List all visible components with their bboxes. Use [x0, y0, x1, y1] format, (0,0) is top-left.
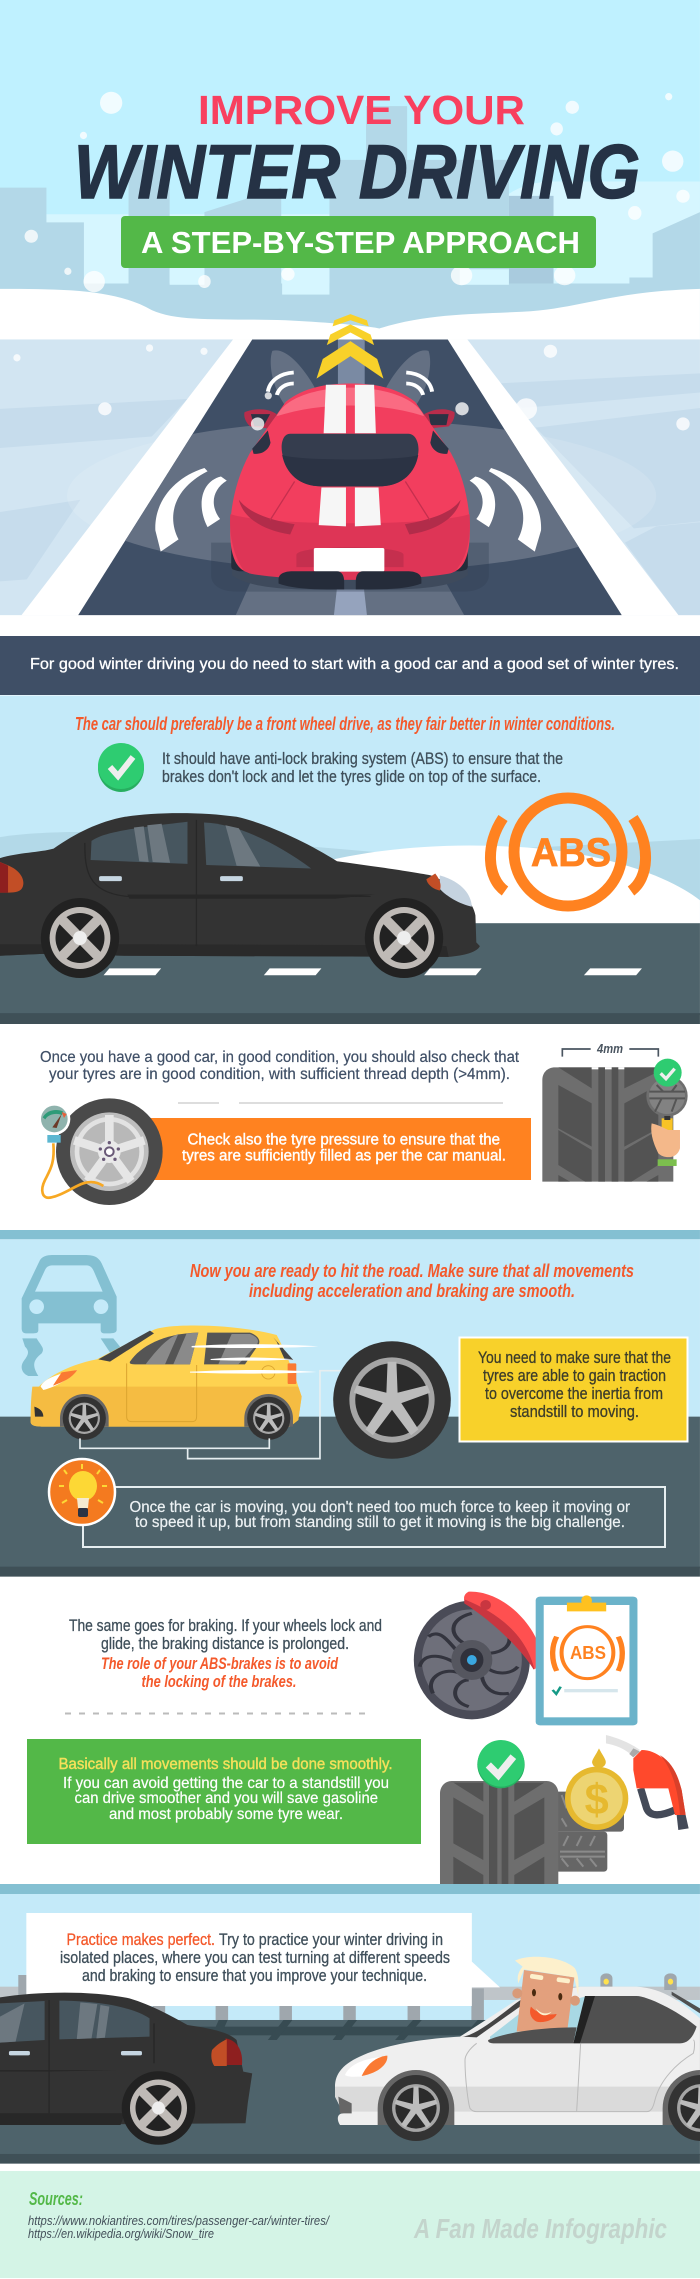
speech bubble text: and braking to ensure that you improve your technique.	[82, 1966, 427, 1985]
large wheel	[333, 1341, 451, 1459]
icon: sensor waves	[155, 373, 541, 552]
green callout	[27, 1739, 421, 1844]
sources heading: Sources:	[29, 2189, 83, 2209]
yellow callout	[460, 1338, 688, 1442]
title: winter driving: WINTER DRIVING	[74, 130, 640, 215]
city skyline	[0, 106, 700, 339]
icon: light bulb	[49, 1459, 115, 1525]
icon: skidding car	[22, 1255, 120, 1376]
green callout: If you can avoid getting the car to a standstill you	[63, 1775, 389, 1792]
moving car callout: Once the car is moving, you don't need too much force to keep it moving or	[130, 1499, 630, 1516]
snowy ground	[0, 339, 700, 615]
orange callout: tyres are sufficiently filled as per the car manual.	[182, 1148, 506, 1164]
black car	[0, 813, 480, 978]
orange callout: Check also the tyre pressure to ensure that the	[188, 1132, 500, 1148]
green callout: Basically all movements should be done smoothly.	[58, 1756, 392, 1773]
falling snow	[13, 92, 690, 430]
speech bubble text	[60, 1930, 450, 1985]
icon: ABS warning light	[490, 798, 646, 906]
speech bubble text: isolated places, where you can test turning at different speeds	[60, 1948, 450, 1967]
footer panel	[0, 2171, 700, 2278]
icon: tread depth: 4mm	[596, 1041, 623, 1056]
tyre condition text: your tyres are in good condition, with sufficient thread depth (>4mm).	[49, 1066, 510, 1083]
icon: check mark	[98, 743, 144, 792]
icon: ABS warning light: ABS	[531, 831, 611, 875]
white car with driver	[335, 1957, 700, 2141]
icon: tyres, coin and fuel nozzle	[440, 1735, 689, 1885]
intro banner	[0, 636, 700, 695]
tyre condition text: Once you have a good car, in good condition, you should also check that	[40, 1049, 520, 1066]
panel: practice	[0, 1884, 700, 2164]
title: improve your: IMPROVE YOUR	[198, 87, 525, 133]
source links	[28, 2214, 330, 2241]
yellow car	[31, 1325, 318, 1440]
intro banner: For good winter driving you do need to start with a good car and a good set of winter tyres.	[30, 656, 679, 673]
subtitle banner: A STEP-BY-STEP APPROACH	[141, 225, 580, 260]
speech bubble text: Practice makes perfect.	[66, 1930, 215, 1949]
connector lines	[80, 1371, 340, 1459]
moving car callout: to speed it up, but from standing still to get it moving is the big challenge.	[135, 1514, 625, 1531]
ABS text block: It should have anti-lock braking system (ABS) to ensure that the	[162, 749, 563, 768]
red car rear view	[211, 384, 489, 592]
braking text: The role of your ABS-brakes is to avoid	[101, 1654, 338, 1673]
icon: tyres, coin and fuel nozzle: $	[585, 1776, 609, 1824]
green callout: can drive smoother and you will save gasoline	[74, 1790, 378, 1807]
black car rear	[0, 1993, 252, 2145]
guard rail	[0, 1973, 700, 2020]
ABS text block: brakes don't lock and let the tyres glide on top of the surface.	[162, 767, 541, 786]
snow hill	[0, 289, 700, 341]
icon: brake disc	[414, 1592, 542, 1719]
braking text	[69, 1616, 382, 1691]
orange callout	[150, 1118, 531, 1180]
panel: check tyres	[0, 1024, 700, 1230]
panel: hero winter scene	[0, 0, 700, 640]
rear window	[282, 434, 419, 486]
panel: braking	[0, 1577, 700, 1885]
tyre condition text	[40, 1049, 520, 1083]
source links: https://www.nokiantires.com/tires/passenger-car/winter-tires/	[28, 2214, 330, 2228]
icon: ABS clipboard: ABS	[570, 1643, 606, 1663]
yellow callout: tyres are able to gain traction	[483, 1366, 666, 1385]
yellow callout: to overcome the inertia from	[485, 1384, 663, 1403]
icon: tyre with pressure gauge	[38, 1098, 163, 1205]
braking text: glide, the braking distance is prolonged.	[101, 1634, 349, 1653]
moving car callout	[83, 1487, 665, 1547]
braking text: The same goes for braking. If your wheels lock and	[69, 1616, 382, 1635]
source links: https://en.wikipedia.org/wiki/Snow_tire	[28, 2227, 214, 2241]
ABS text block	[162, 749, 563, 786]
icon: tread depth	[542, 1041, 686, 1182]
braking text: the locking of the brakes.	[142, 1672, 296, 1691]
speech bubble text: Try to practice your winter driving in	[219, 1930, 443, 1949]
panel: hit the road	[0, 1230, 700, 1577]
icon: ABS clipboard	[536, 1595, 637, 1725]
green callout: and most probably some tyre wear.	[109, 1806, 343, 1823]
road tip text	[190, 1261, 634, 1301]
icon: yellow chevrons	[316, 314, 383, 379]
racing stripes	[319, 385, 381, 526]
driver	[512, 1957, 580, 2032]
road	[21, 339, 679, 615]
panel: good car	[0, 695, 700, 1024]
subtitle banner	[121, 216, 596, 268]
road tip text: including acceleration and braking are smooth.	[249, 1281, 575, 1301]
yellow callout: standstill to moving.	[510, 1402, 639, 1421]
speech bubble	[26, 1913, 500, 2006]
